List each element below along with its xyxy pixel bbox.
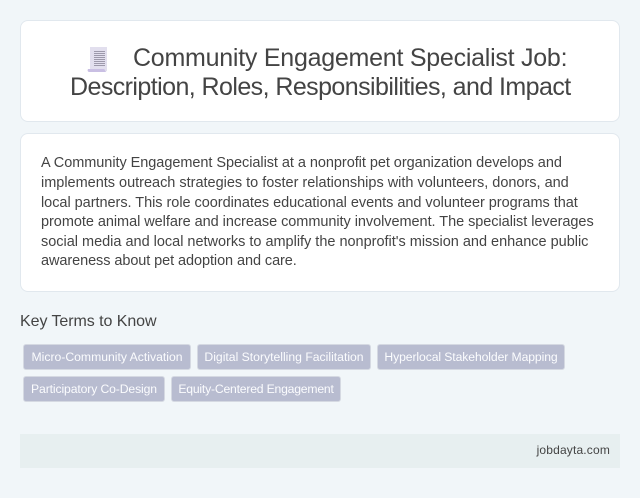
tag — [377, 344, 565, 370]
description text: social media and local networks to amplify the nonprofit's mission and enhance public — [41, 234, 588, 250]
tags — [23, 344, 565, 402]
tag: Hyperlocal Stakeholder Mapping — [384, 350, 558, 364]
description text: implements outreach strategies to foster relationships with volunteers, donors, and — [41, 175, 569, 191]
footer bar — [20, 434, 620, 468]
tag: Participatory Co-Design — [31, 382, 157, 396]
description text: local partners. This role coordinates educational events and volunteer programs that — [41, 195, 578, 211]
panel: description — [20, 133, 620, 292]
panel: title card — [20, 20, 620, 122]
icon: document scroll — [88, 47, 107, 72]
description text: A Community Engagement Specialist at a nonprofit pet organization develops and — [41, 155, 562, 171]
footer: site name: jobdayta.com — [537, 443, 610, 457]
tag — [197, 344, 371, 370]
heading: key terms: Key Terms to Know — [20, 313, 157, 330]
title line 1: Community Engagement Specialist Job: — [133, 44, 567, 72]
description text: promote animal welfare and increase community involvement. The specialist leverages — [41, 214, 594, 230]
description text — [41, 155, 594, 269]
tag: Equity-Centered Engagement — [178, 382, 334, 396]
tag: Digital Storytelling Facilitation — [204, 350, 364, 364]
description text: awareness about pet adoption and care. — [41, 253, 297, 269]
title line 2: Description, Roles, Responsibilities, and Impact — [70, 73, 571, 101]
tag — [171, 376, 341, 402]
tag — [23, 376, 165, 402]
tag: Micro-Community Activation — [31, 350, 183, 364]
tag — [23, 344, 191, 370]
